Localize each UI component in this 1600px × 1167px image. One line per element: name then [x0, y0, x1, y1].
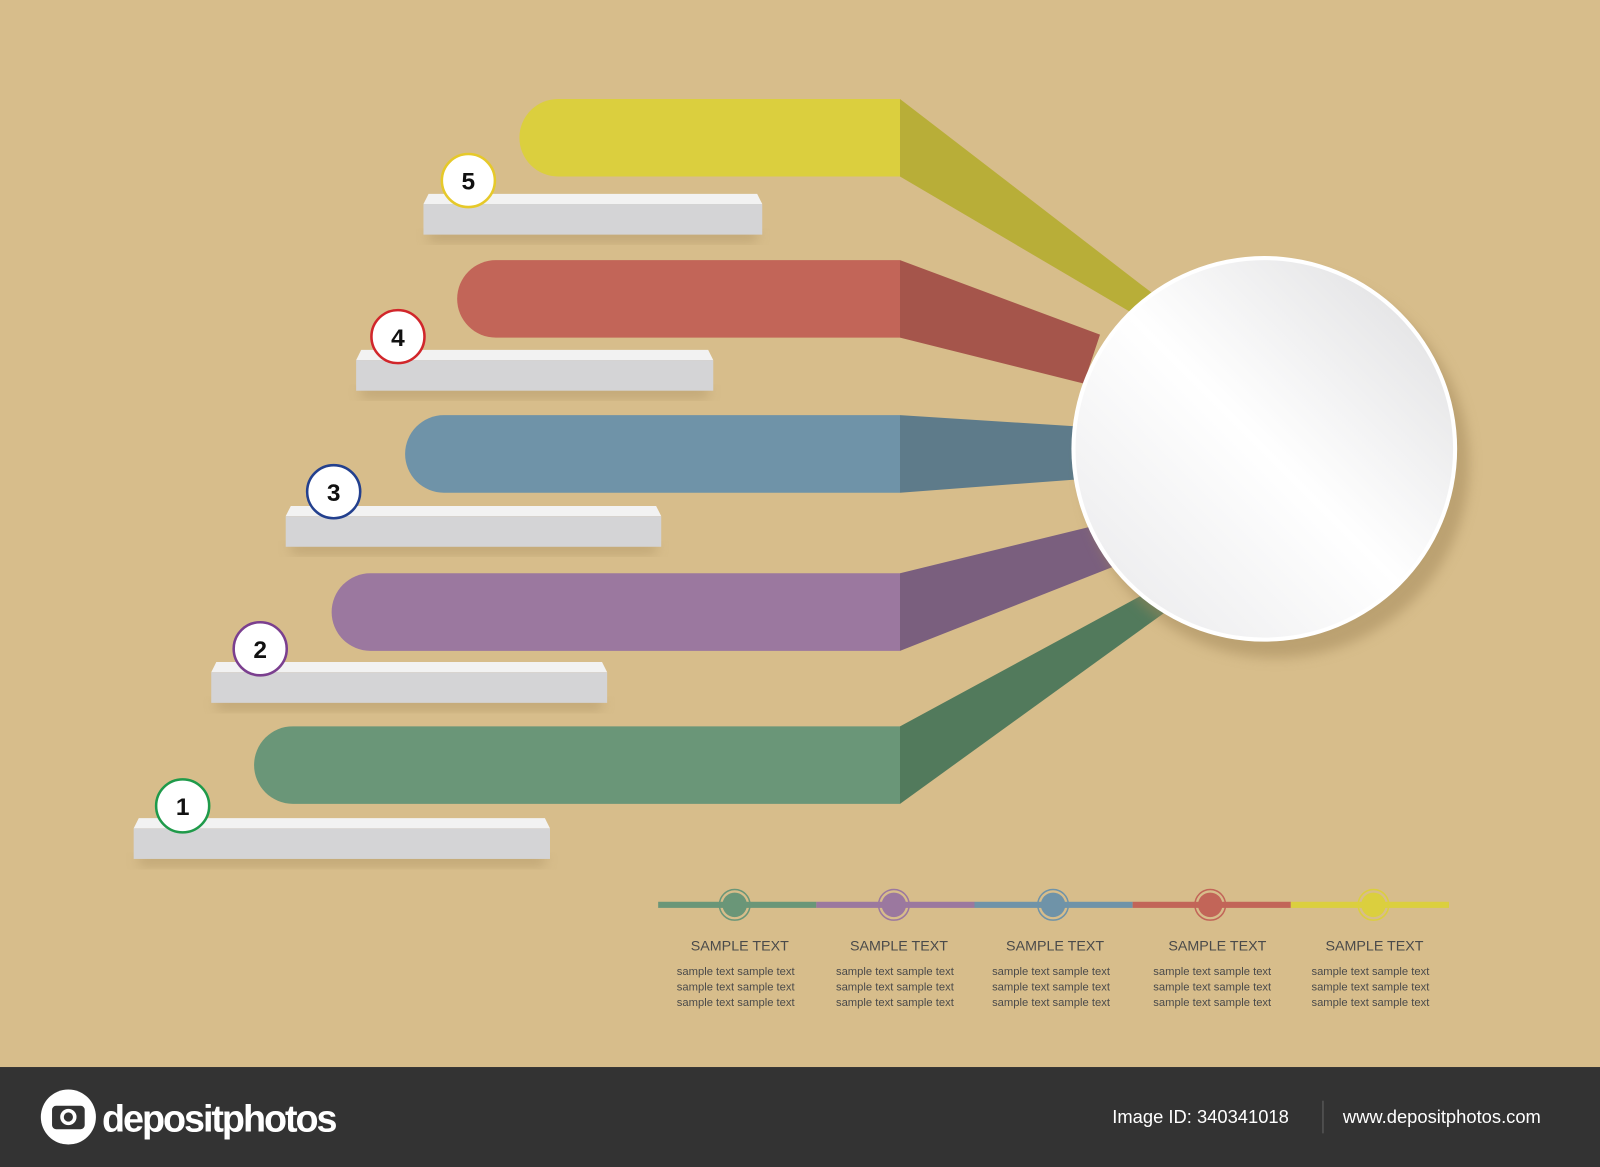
shelf 4 — [356, 350, 713, 397]
shelf 1 — [134, 818, 550, 865]
legend text 1: SAMPLE TEXT — [691, 939, 789, 955]
central circle — [1071, 256, 1469, 658]
legend text 4: sample text sample text — [1153, 997, 1272, 1009]
legend text 5: sample text sample text — [1311, 966, 1430, 978]
legend text 4: SAMPLE TEXT — [1168, 939, 1267, 955]
connectors — [900, 99, 1165, 804]
legend text 1: sample text sample text — [677, 966, 796, 978]
legend text 2 — [836, 939, 955, 1009]
legend text 1 — [677, 939, 796, 1009]
legend text 3: sample text sample text — [992, 982, 1111, 994]
badge 4 — [371, 310, 424, 363]
footer bar: Image ID: 340341018 — [1112, 1106, 1289, 1127]
legend text 1: sample text sample text — [677, 982, 796, 994]
legend text 5: sample text sample text — [1311, 982, 1430, 994]
icon: camera logo — [41, 1089, 96, 1145]
footer bar: www.depositphotos.com — [1342, 1106, 1541, 1127]
badge 2: 2 — [253, 637, 267, 664]
bar: purple — [332, 573, 900, 651]
shelf 3 — [286, 506, 661, 553]
legend text 2: sample text sample text — [836, 997, 955, 1009]
legend text 4 — [1153, 939, 1272, 1009]
badge 5: 5 — [462, 169, 475, 196]
shelf 5 — [423, 194, 762, 241]
bar: green — [254, 726, 900, 804]
legend timeline — [658, 890, 1449, 920]
legend text 2: sample text sample text — [836, 982, 955, 994]
legend text 3: sample text sample text — [992, 966, 1111, 978]
badge 3: 3 — [327, 480, 340, 507]
legend text 2: SAMPLE TEXT — [850, 939, 948, 955]
legend text 5 — [1311, 939, 1430, 1009]
bar: blue — [405, 415, 900, 493]
badge 2 — [234, 622, 287, 675]
legend text 4: sample text sample text — [1153, 982, 1272, 994]
bar: yellow — [519, 99, 900, 176]
legend text 5: sample text sample text — [1311, 997, 1430, 1009]
badge 3 — [307, 465, 360, 518]
bar: red — [457, 260, 900, 338]
shelf 2 — [211, 662, 607, 709]
legend text 3 — [992, 939, 1111, 1009]
legend text 1: sample text sample text — [677, 997, 796, 1009]
legend text 4: sample text sample text — [1153, 966, 1272, 978]
badge 1 — [156, 779, 209, 832]
footer bar — [0, 1067, 1600, 1167]
legend text 2: sample text sample text — [836, 966, 955, 978]
legend text 3: sample text sample text — [992, 997, 1111, 1009]
badge 4: 4 — [391, 325, 405, 352]
badge 1: 1 — [176, 794, 189, 821]
badge 5 — [442, 154, 495, 207]
footer bar: depositphotos — [102, 1097, 337, 1139]
legend text 5: SAMPLE TEXT — [1325, 939, 1424, 955]
legend text 3: SAMPLE TEXT — [1006, 939, 1104, 955]
